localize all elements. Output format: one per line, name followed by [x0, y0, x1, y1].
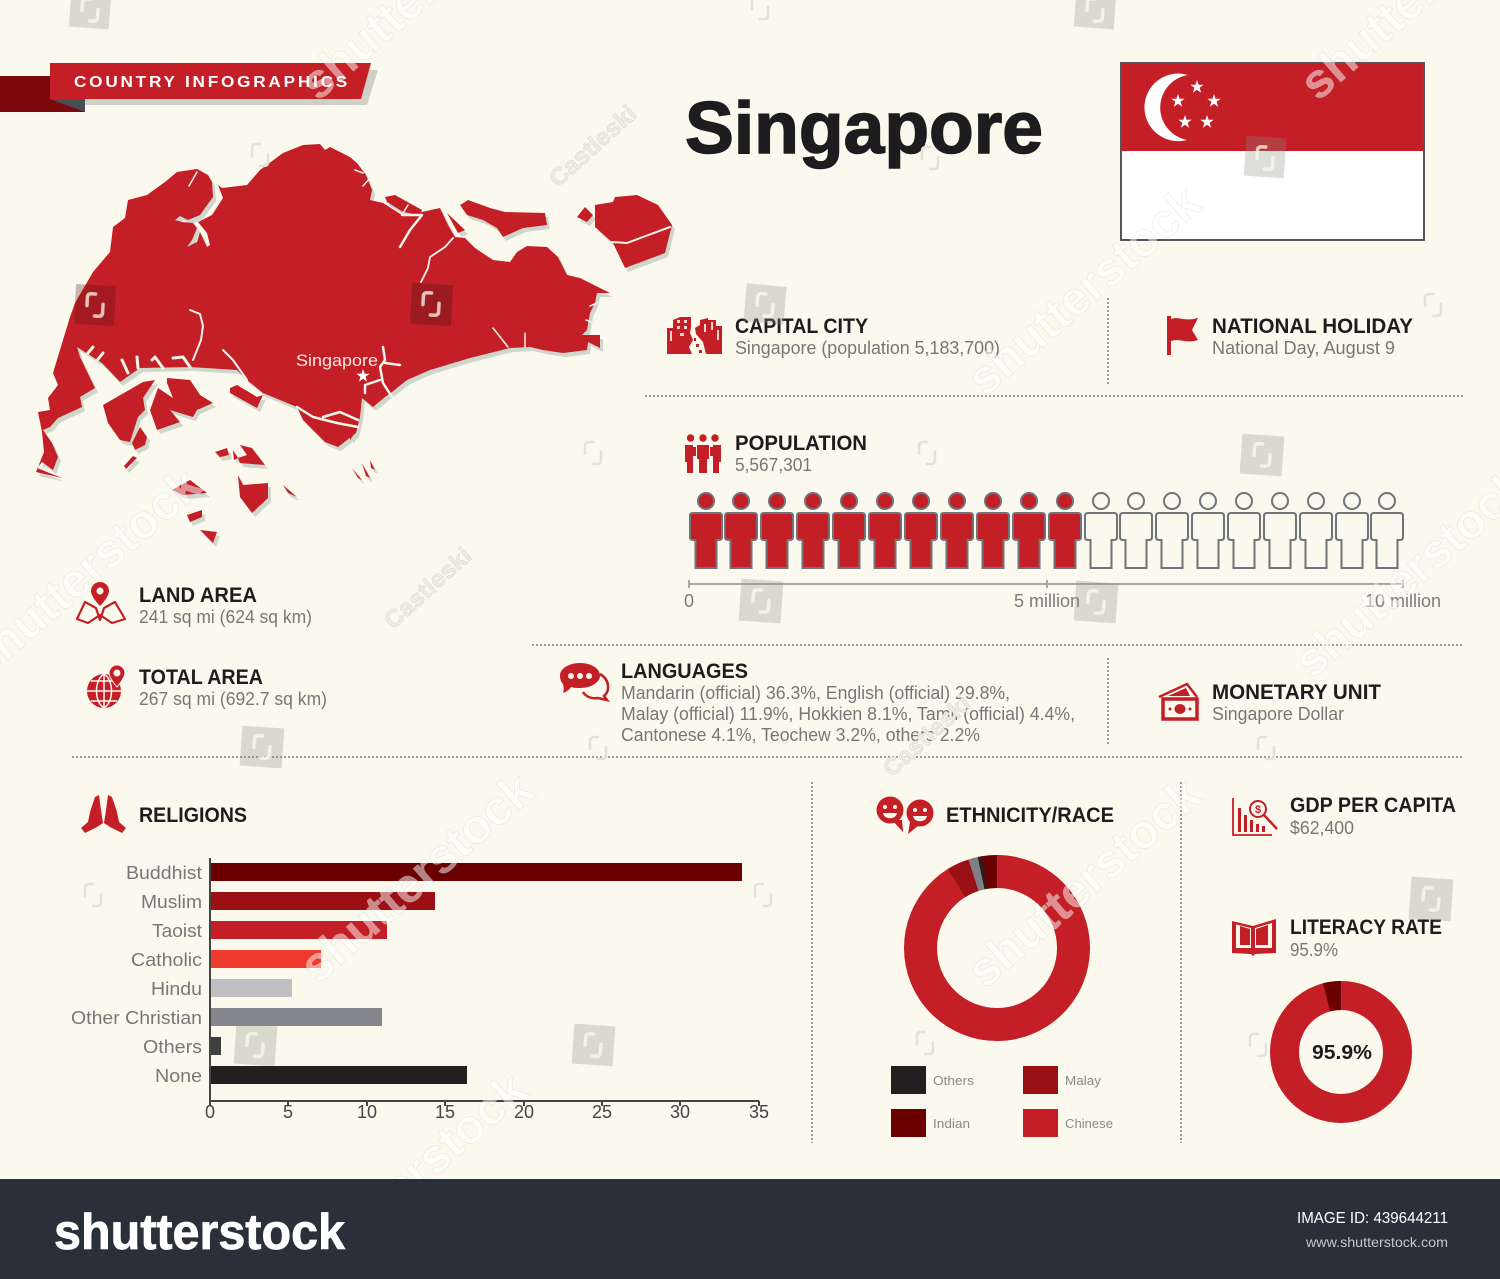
footer bar	[0, 1179, 1500, 1279]
icon: flag	[1167, 316, 1198, 355]
bar chart: religions: Muslim	[141, 892, 202, 912]
bar chart: religions: Hindu	[151, 979, 202, 999]
dotted dividers	[72, 298, 1464, 1143]
donut chart: ethnicity	[920, 855, 1074, 1024]
panel: languages	[560, 660, 1075, 745]
map rivers	[88, 170, 670, 427]
panel: languages: Mandarin (official) 36.3%, English (official) 29.8%,	[621, 683, 1010, 703]
panel: gdp per capita	[1233, 794, 1456, 838]
banner: country infographics	[0, 63, 378, 112]
icon: globe with pin	[87, 665, 125, 708]
icon: open book	[1232, 919, 1276, 956]
map label: Singapore capital: Singapore	[296, 351, 378, 370]
panel: literacy rate	[1232, 916, 1442, 1108]
panel: national holiday: NATIONAL HOLIDAY	[1212, 315, 1413, 338]
panel: land area	[77, 582, 312, 627]
bar chart: religions: Buddhist	[126, 863, 202, 883]
donut chart: literacy	[1284, 981, 1398, 1108]
population axis: 0	[684, 591, 694, 611]
legend: ethnicity: Others	[933, 1073, 975, 1088]
legend: ethnicity: Chinese	[1065, 1116, 1113, 1131]
watermarks: shutterstock	[957, 176, 1211, 406]
panel: ethnicity: ETHNICITY/RACE	[946, 804, 1114, 827]
bar chart: religions	[71, 858, 769, 1122]
title: Singapore	[685, 88, 1043, 169]
footer bar: www.shutterstock.com	[1305, 1234, 1448, 1250]
map label: Singapore capital	[296, 351, 378, 382]
legend: ethnicity: Malay	[1065, 1073, 1102, 1088]
bar chart: religions: 10	[357, 1102, 377, 1122]
population axis: 5 million	[1014, 591, 1080, 611]
donut chart: literacy: 95.9%	[1312, 1042, 1372, 1064]
panel: languages: Cantonese 4.1%, Teochew 3.2%, others 2.2%	[621, 725, 980, 745]
panel: land area: 241 sq mi (624 sq km)	[139, 607, 312, 627]
bar chart: religions: 0	[205, 1102, 215, 1122]
watermarks: Castleski	[379, 542, 477, 634]
bar chart: religions: 15	[435, 1102, 455, 1122]
panel: capital city: Singapore (population 5,183,700)	[735, 338, 1000, 358]
panel: total area	[87, 665, 327, 709]
panel: monetary unit: Singapore Dollar	[1212, 704, 1344, 724]
icon: speech bubbles	[560, 663, 608, 700]
panel: languages: LANGUAGES	[621, 660, 748, 683]
icon: money	[1159, 684, 1197, 719]
panel: languages: Malay (official) 11.9%, Hokkien 8.1%, Tamil (official) 4.4%,	[621, 704, 1075, 724]
icon: praying hands	[81, 795, 126, 833]
watermarks: Castleski	[544, 100, 642, 192]
panel: national holiday	[1167, 315, 1413, 358]
panel: population: POPULATION	[735, 432, 867, 455]
bar chart: religions: None	[155, 1066, 202, 1086]
footer bar: shutterstock	[54, 1204, 345, 1260]
panel: capital city: CAPITAL CITY	[735, 315, 868, 338]
population axis	[684, 580, 1441, 611]
panel: land area: LAND AREA	[139, 584, 257, 607]
bar chart: religions: 5	[283, 1102, 293, 1122]
flag of Singapore	[1121, 63, 1424, 240]
panel: national holiday: National Day, August 9	[1212, 338, 1395, 358]
icon: map with pin	[77, 582, 125, 623]
footer bar: IMAGE ID: 439644211	[1297, 1210, 1448, 1227]
panel: gdp per capita: GDP PER CAPITA	[1290, 794, 1456, 817]
legend: ethnicity	[891, 1066, 1113, 1137]
bar chart: religions: 35	[749, 1102, 769, 1122]
panel: literacy rate: LITERACY RATE	[1290, 916, 1442, 939]
panel: total area: TOTAL AREA	[139, 666, 263, 689]
banner: country infographics: COUNTRY INFOGRAPHICS	[74, 74, 350, 91]
map of Singapore	[36, 144, 672, 543]
watermarks: Castleski	[878, 690, 976, 782]
panel: capital city	[667, 315, 1000, 358]
bar chart: religions: Others	[143, 1037, 202, 1057]
icon: city and road	[667, 317, 722, 354]
pictogram: population people	[690, 493, 1403, 568]
watermarks: shutterstock	[290, 763, 544, 993]
bar chart: religions: 20	[514, 1102, 534, 1122]
panel: gdp per capita: $62,400	[1290, 818, 1354, 838]
panel: monetary unit: MONETARY UNIT	[1212, 681, 1381, 704]
bar chart: religions: Taoist	[152, 921, 202, 941]
panel: monetary unit	[1159, 681, 1381, 724]
legend: ethnicity: Indian	[933, 1116, 970, 1131]
icon: two faces	[876, 796, 934, 834]
bar chart: religions: 30	[670, 1102, 690, 1122]
panel: population	[684, 432, 1441, 611]
watermarks: shutterstock	[957, 768, 1211, 998]
icon: chart with magnifier: $	[1255, 804, 1261, 816]
panel: literacy rate: 95.9%	[1290, 940, 1338, 960]
panel: ethnicity	[876, 796, 1114, 1137]
bar chart: religions: Other Christian	[71, 1008, 202, 1028]
panel: population: 5,567,301	[735, 455, 812, 475]
panel: religions: RELIGIONS	[139, 804, 247, 827]
bar chart: religions: Catholic	[131, 950, 202, 970]
population axis: 10 million	[1365, 591, 1441, 611]
panel: religions	[71, 795, 769, 1122]
icon: chart with magnifier	[1233, 798, 1277, 835]
icon: three people	[685, 434, 721, 473]
bar chart: religions: 25	[592, 1102, 612, 1122]
panel: total area: 267 sq mi (692.7 sq km)	[139, 689, 327, 709]
